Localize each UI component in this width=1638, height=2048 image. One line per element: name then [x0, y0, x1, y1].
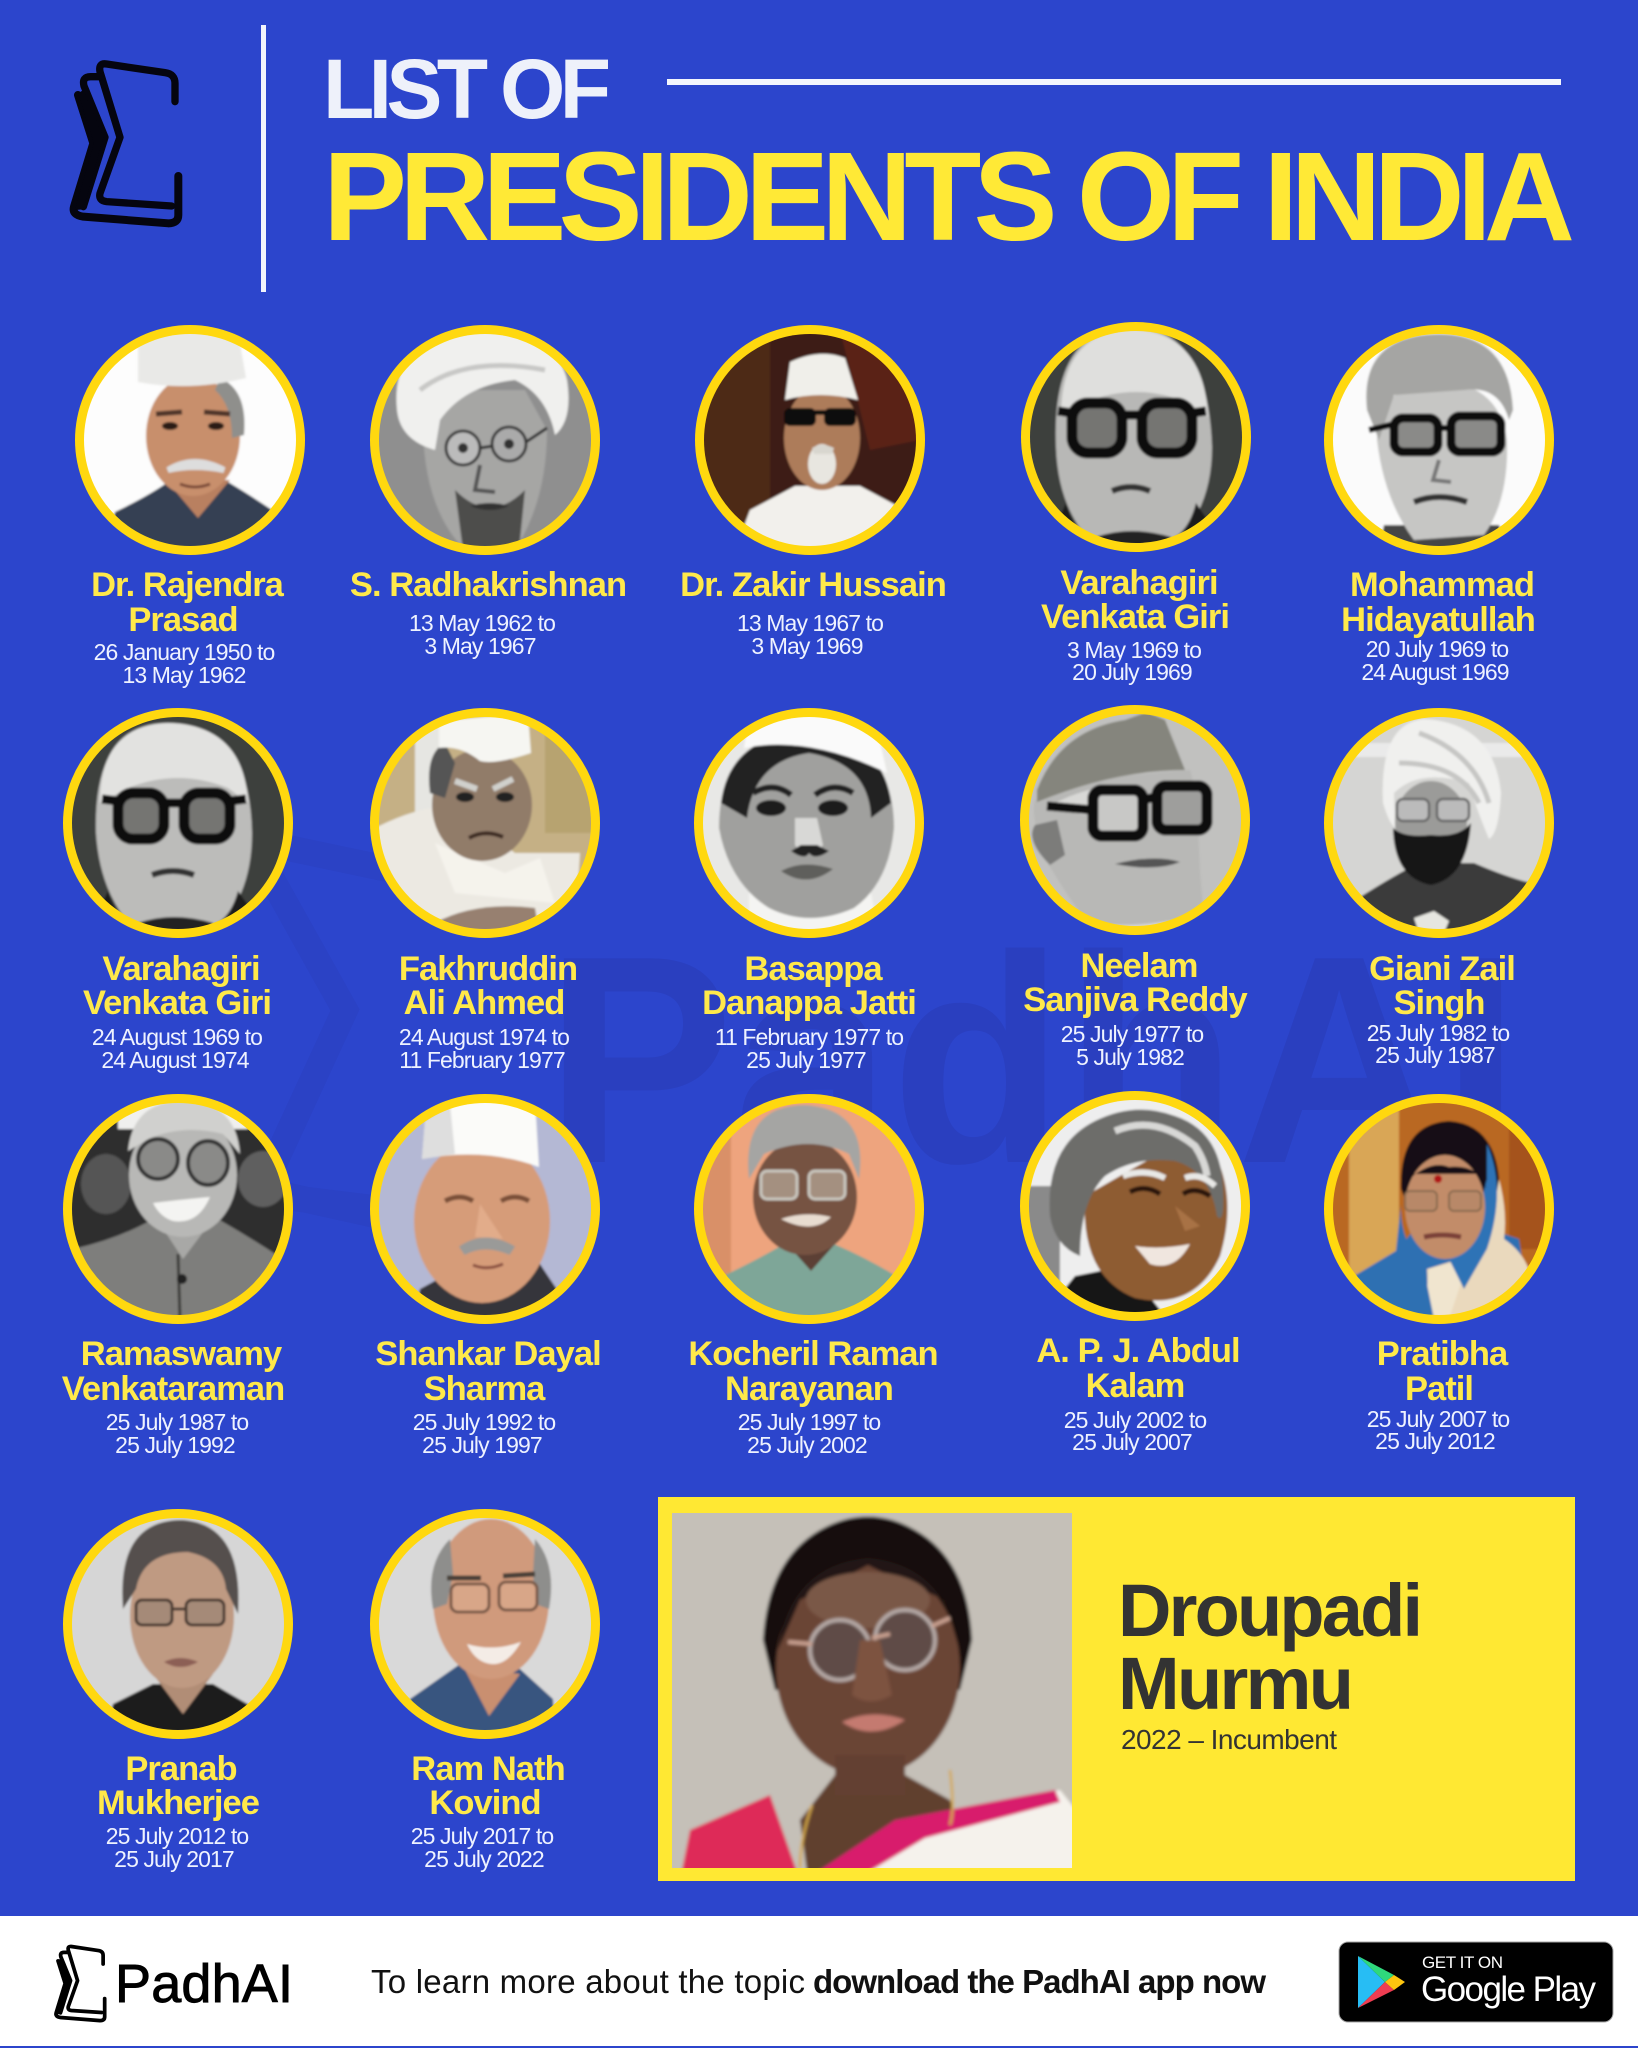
name: Sharma [424, 1370, 546, 1408]
title rule [667, 79, 1561, 85]
portrait: Sanjiva Reddy [1015, 700, 1255, 940]
president: S. Radhakrishnan [350, 320, 626, 659]
dates: 25 July 2007 [1072, 1429, 1192, 1455]
name: Venkata Giri [1041, 598, 1229, 636]
name: Patil [1405, 1370, 1473, 1408]
name: Ram Nath [411, 1750, 565, 1788]
portrait: K. R. Narayanan [689, 1089, 929, 1329]
name line 2: Murmu [1118, 1642, 1354, 1725]
portrait: Ram Nath Kovind [365, 1504, 605, 1744]
bottom edge [0, 2046, 1638, 2048]
dates: 5 July 1982 [1076, 1044, 1184, 1070]
Google Play badge: Google Play [1421, 1970, 1596, 2009]
dates: 20 July 1969 to [1366, 636, 1508, 662]
name: Ali Ahmed [404, 984, 564, 1022]
president: Giani Zail Singh [1319, 703, 1559, 1068]
portrait: Zakir Hussain [690, 320, 930, 560]
president: Kocheril Raman Narayanan [688, 1089, 938, 1458]
dates: 25 July 1997 to [738, 1409, 880, 1435]
dates: 26 January 1950 to [94, 639, 274, 665]
dates: 3 May 1967 [424, 633, 536, 659]
president: Dr. Zakir Hussain [680, 320, 946, 659]
title line 1: LIST OF [323, 42, 611, 136]
dates: 25 July 2007 to [1367, 1406, 1509, 1432]
president: Varahagiri Venkata Giri (second term) [58, 703, 298, 1073]
footer call to action: To learn more about the topic [371, 1963, 805, 2000]
name: S. Radhakrishnan [350, 566, 626, 604]
name: Sanjiva Reddy [1023, 981, 1248, 1019]
portrait: Zail Singh [1319, 703, 1559, 943]
dates: 25 July 1992 to [413, 1409, 555, 1435]
footer call to action: download the PadhAI app now [813, 1963, 1266, 2000]
portrait: Pratibha Patil [1319, 1089, 1559, 1329]
president: Basappa Danappa Jatti [689, 703, 929, 1073]
dates: 25 July 1997 [422, 1432, 542, 1458]
president: Ramaswamy Venkataraman [58, 1089, 298, 1458]
panel: Droupadi Murmu [658, 1497, 1575, 1881]
name: Narayanan [725, 1370, 893, 1408]
Google Play badge: GET IT ON [1422, 1953, 1503, 1972]
name: Hidayatullah [1341, 601, 1535, 639]
dates: 11 February 1977 [399, 1047, 565, 1073]
dates: 25 July 2017 [114, 1846, 234, 1872]
dates: 25 July 1987 [1375, 1042, 1495, 1068]
name: Basappa [744, 950, 883, 988]
photo: Droupadi Murmu [672, 1513, 1072, 1868]
dates: 25 July 2002 to [1064, 1407, 1206, 1433]
footer logo icon [56, 1946, 105, 2021]
dates: 25 July 1992 [115, 1432, 235, 1458]
dates: 13 May 1962 [122, 662, 246, 688]
name: Dr. Rajendra [91, 566, 285, 604]
president: Pranab Mukherjee [58, 1504, 298, 1872]
portrait: Fakhruddin Ali Ahmed [365, 703, 605, 943]
name: Mukherjee [97, 1784, 260, 1822]
portrait: V. V. Giri [58, 703, 298, 943]
portrait: Hidayatullah [1319, 320, 1559, 560]
dates: 25 July 1982 to [1367, 1020, 1509, 1046]
president: Ram Nath Kovind [365, 1504, 605, 1872]
name: Singh [1393, 984, 1485, 1022]
name: Giani Zail [1369, 950, 1515, 988]
president: Pratibha Patil [1319, 1089, 1559, 1454]
dates: 25 July 2002 [747, 1432, 867, 1458]
portrait: Venkataraman [58, 1089, 298, 1329]
name: Varahagiri [102, 950, 260, 988]
president: Neelam Sanjiva Reddy [1015, 700, 1255, 1070]
dates: 3 May 1969 [751, 633, 863, 659]
name: Shankar Dayal [375, 1335, 601, 1373]
dates: 25 July 2012 [1375, 1428, 1495, 1454]
Google Play badge [1339, 1942, 1613, 2022]
dates: 24 August 1969 [1361, 659, 1509, 685]
portrait: Radhakrishnan [365, 320, 605, 560]
dates: 11 February 1977 to [715, 1024, 903, 1050]
president: Fakhruddin Ali Ahmed [365, 703, 605, 1073]
portrait: B. D. Jatti [689, 703, 929, 943]
name: Neelam [1080, 947, 1198, 985]
president: Mohammad Hidayatullah [1319, 320, 1559, 685]
name: Kovind [429, 1784, 541, 1822]
president: Shankar Dayal Sharma [365, 1089, 605, 1458]
name: Pranab [125, 1750, 237, 1788]
footer logo wordmark: PadhAI [115, 1954, 293, 2014]
name: Dr. Zakir Hussain [680, 566, 946, 604]
header divider [261, 25, 266, 292]
footer bar [0, 1916, 1638, 2046]
dates: 13 May 1967 to [737, 610, 883, 636]
president: A. P. J. Abdul Kalam [1015, 1086, 1255, 1455]
dates: 24 August 1969 to [92, 1024, 262, 1050]
dates: 25 July 2012 to [106, 1823, 248, 1849]
dates: 25 July 1977 [746, 1047, 866, 1073]
name: Varahagiri [1060, 564, 1218, 602]
name: Kalam [1086, 1367, 1184, 1405]
dates: 25 July 1977 to [1061, 1021, 1203, 1047]
portrait: Abdul Kalam [1015, 1086, 1255, 1326]
dates: 24 August 1974 to [399, 1024, 569, 1050]
dates: 25 July 1987 to [106, 1409, 248, 1435]
dates: 25 July 2017 to [411, 1823, 553, 1849]
portrait: Pranab Mukherjee [58, 1504, 298, 1744]
name: Ramaswamy [81, 1335, 282, 1373]
portrait: V. V. Giri [1016, 317, 1256, 557]
name: Prasad [128, 601, 238, 639]
term: 2022 – Incumbent [1121, 1724, 1337, 1755]
portrait: Rajendra Prasad [70, 320, 310, 560]
president: Varahagiri Venkata Giri (first term) [1016, 317, 1256, 685]
title line 2: PRESIDENTS OF INDIA [323, 126, 1575, 267]
header logo [74, 64, 178, 223]
dates: 24 August 1974 [101, 1047, 250, 1073]
name: Fakhruddin [399, 950, 577, 988]
footer call to action [371, 1963, 1266, 2000]
name: Venkata Giri [83, 984, 271, 1022]
watermark: PadhAI: PadhAI [545, 894, 1520, 1225]
dates: 20 July 1969 [1072, 659, 1192, 685]
name: Kocheril Raman [688, 1335, 938, 1373]
dates: 3 May 1969 to [1067, 637, 1201, 663]
president: Dr. Rajendra Prasad [70, 320, 310, 688]
name: Venkataraman [62, 1370, 284, 1408]
watermark: PadhAI [250, 840, 1520, 1225]
name: Droupadi [1118, 1569, 1423, 1652]
name: Mohammad [1350, 566, 1534, 604]
panel background [658, 1497, 1575, 1881]
name: Danappa Jatti [702, 984, 916, 1022]
name: A. P. J. Abdul [1036, 1332, 1240, 1370]
dates: 13 May 1962 to [409, 610, 555, 636]
dates: 25 July 2022 [424, 1846, 544, 1872]
portrait: Shankar Dayal Sharma [365, 1089, 605, 1329]
name: Pratibha [1377, 1335, 1509, 1373]
